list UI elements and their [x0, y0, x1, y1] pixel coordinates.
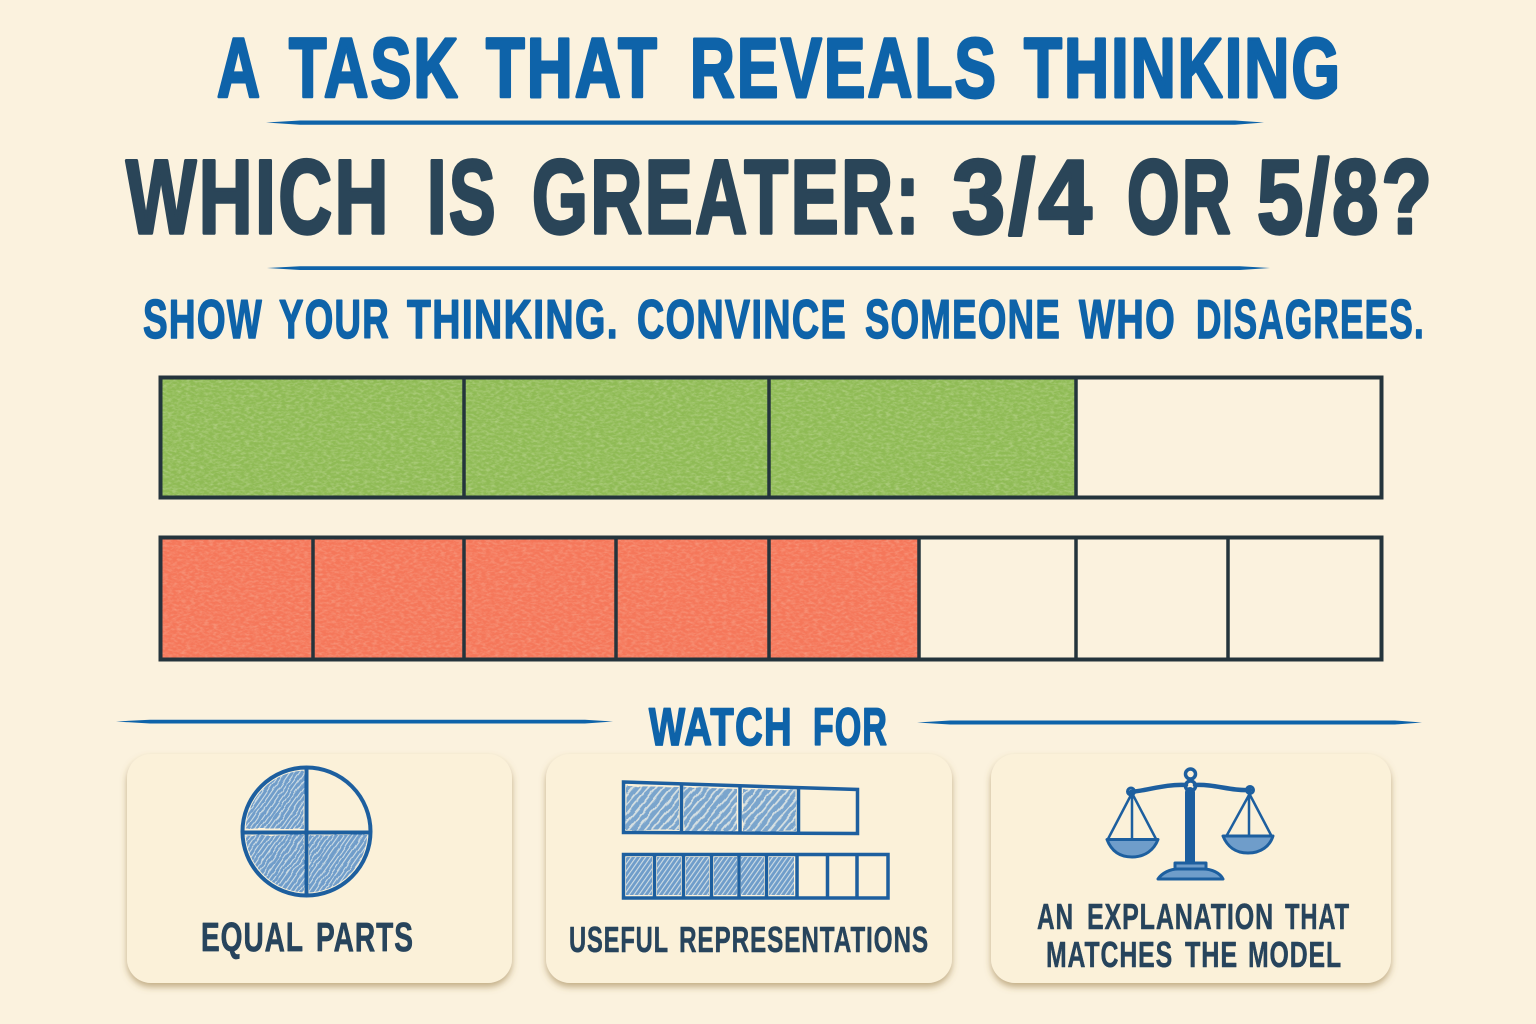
title [217, 21, 1342, 115]
subtitle prompt [143, 288, 1425, 350]
panel: useful representations [546, 754, 952, 983]
title: REVEALS [690, 21, 998, 115]
question heading: 5/8? [1257, 139, 1435, 256]
label: explanation line one: EXPLANATION [1087, 896, 1274, 937]
subtitle prompt: THINKING. [407, 288, 619, 350]
fraction bar: five eighths [160, 538, 1382, 660]
question heading: 3/4 [952, 139, 1095, 256]
label: explanation line two: MODEL [1248, 934, 1342, 975]
question heading: WHICH [126, 139, 391, 256]
title: THINKING [1024, 21, 1342, 115]
label: useful representations: USEFUL [569, 919, 669, 960]
question heading [126, 139, 1435, 256]
title: TASK [289, 21, 460, 115]
title: THAT [486, 21, 659, 115]
title: A [217, 21, 262, 115]
watch for heading: WATCH [649, 698, 793, 757]
panel: equal parts [127, 754, 512, 983]
label: explanation line one: THAT [1285, 896, 1350, 937]
panel: explanation [991, 754, 1391, 983]
icon: shaded circle [242, 767, 371, 896]
watch for heading: FOR [813, 698, 888, 757]
label: explanation line two [1046, 934, 1342, 975]
subtitle prompt: YOUR [279, 288, 390, 350]
label: useful representations: REPRESENTATIONS [679, 919, 929, 960]
question heading: IS [427, 139, 498, 256]
icon: balance scale [1107, 769, 1273, 879]
label: explanation line one: AN [1037, 896, 1074, 937]
icon: two fraction bars [624, 782, 888, 898]
subtitle prompt: SOMEONE [865, 288, 1061, 350]
subtitle prompt: CONVINCE [637, 288, 847, 350]
label: explanation line two: MATCHES [1046, 934, 1173, 975]
question heading: GREATER: [532, 139, 922, 256]
question heading: OR [1127, 139, 1233, 256]
label: explanation line two: THE [1185, 934, 1238, 975]
fraction bar: three quarters [160, 378, 1382, 498]
subtitle prompt: SHOW [143, 288, 263, 350]
label: equal parts: EQUAL [201, 914, 304, 960]
subtitle prompt: WHO [1079, 288, 1176, 350]
label: useful representations [569, 919, 929, 960]
label: equal parts: PARTS [316, 914, 414, 960]
